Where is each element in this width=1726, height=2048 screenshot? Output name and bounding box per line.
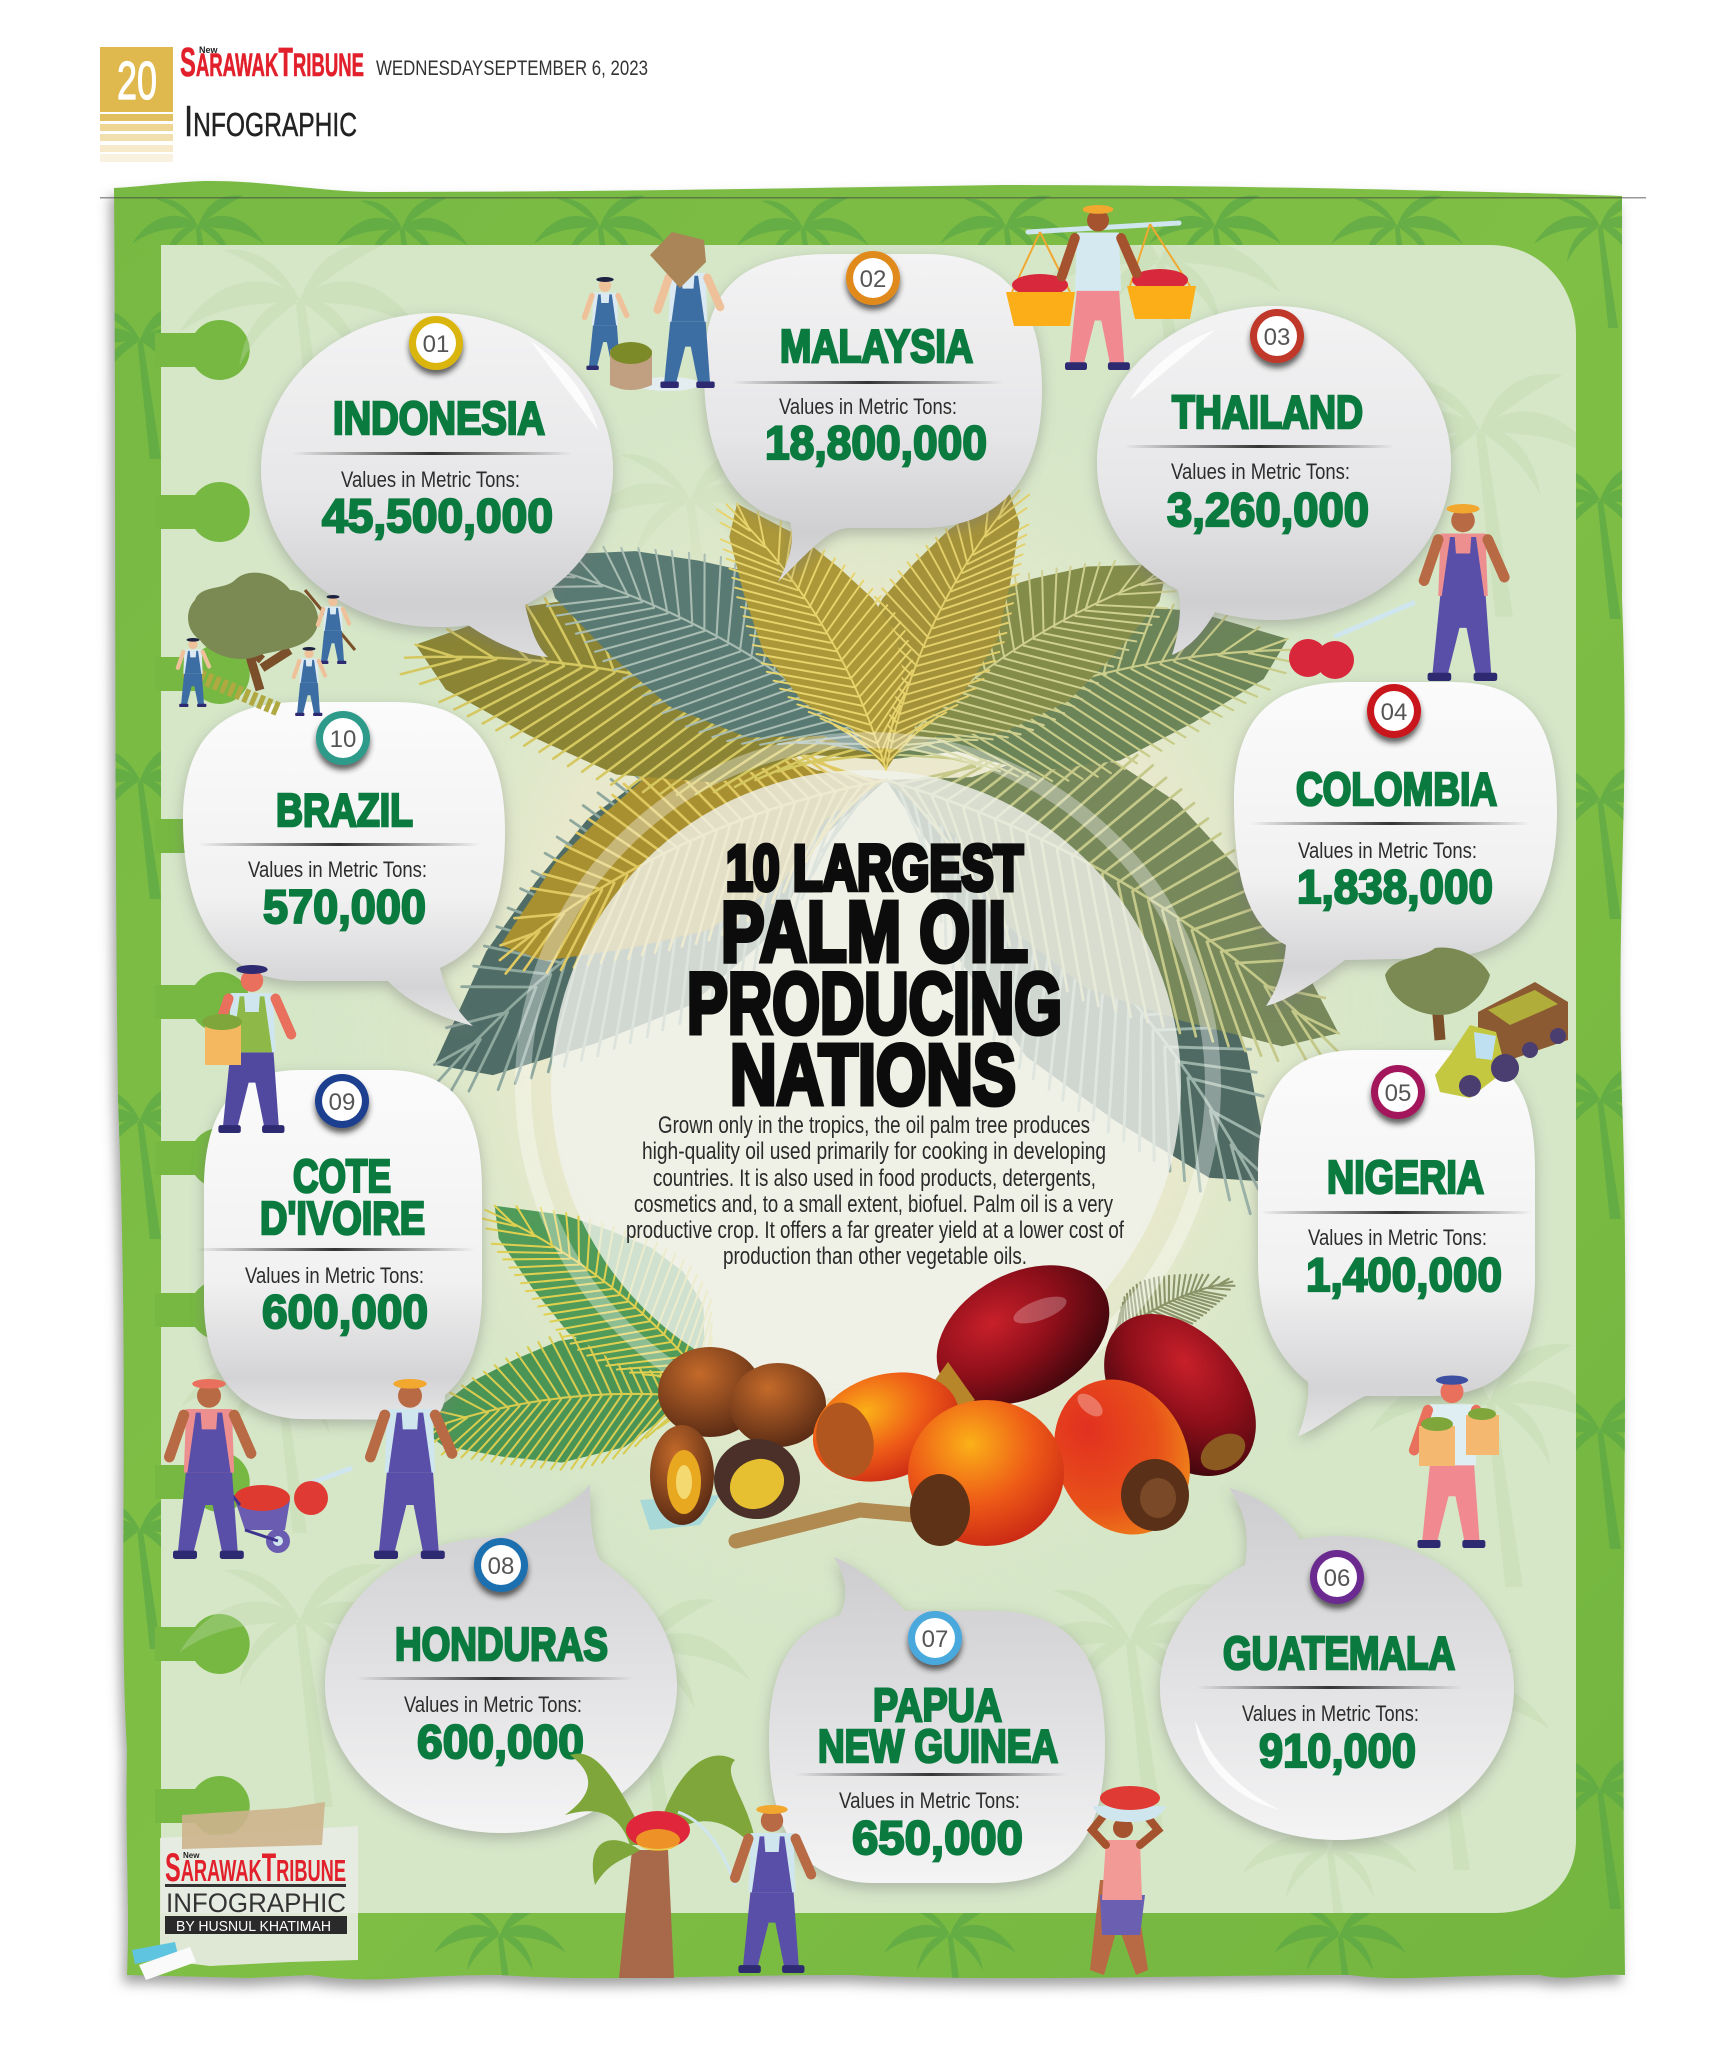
title: 10 LARGEST [726,832,1023,904]
badge 03: 03 [1264,324,1290,351]
description text: production than other vegetable oils. [723,1243,1027,1270]
description text: productive crop. It offers a far greater yield at a lower cost of [626,1217,1124,1244]
badge 08: 08 [488,1553,514,1580]
description text: countries. It is also used in food products, detergents, [653,1165,1096,1192]
metric label: Values in Metric Tons: [1242,1701,1419,1726]
bubble 08: Honduras [325,1484,677,1833]
palm fruit cluster [640,1237,1287,1557]
metric label: Values in Metric Tons: [1298,838,1477,863]
title: PRODUCING [687,956,1062,1052]
panel notebook holes [155,320,250,1836]
country name: THAILAND [1172,386,1363,438]
bubble 07: Papua New Guinea [769,1557,1105,1883]
credit: BY HUSNUL KHATIMAH [176,1918,331,1935]
sticker: infographic credit: New [183,1851,200,1860]
title [687,832,1062,1123]
masking tape [182,1802,325,1849]
illustration: workers with sack [585,232,720,391]
badge 02: 02 [860,266,886,293]
cream glow behind palm [310,360,1430,1640]
badge 03 [1250,309,1304,363]
central translucent circle [523,740,1213,1430]
illustration: woman with fruit basket [1090,1786,1166,1975]
badge 04: 04 [1381,699,1407,726]
badge 01: 01 [423,331,449,358]
metric label: Values in Metric Tons: [1308,1225,1487,1250]
illustration: worker at palm tree [735,1805,811,1973]
badge 07: 07 [922,1626,948,1653]
inner pale panel [161,245,1576,1913]
badge 09 [315,1074,369,1128]
pale panel palm pattern [179,204,1611,1986]
value: 650,000 [852,1811,1023,1864]
header: page number block [100,47,173,162]
illustration: tree with harvesters [178,573,355,716]
metric label: Values in Metric Tons: [248,857,427,882]
metric label: Values in Metric Tons: [245,1263,424,1288]
bubble 06: Guatemala [1160,1488,1514,1840]
title: NATIONS [730,1028,1016,1123]
header: section title: INFOGRAPHIC [184,97,357,146]
value: 910,000 [1259,1724,1416,1777]
badge 05 [1371,1065,1425,1119]
palm tree fronds [357,434,1403,1493]
value: 600,000 [417,1715,584,1768]
metric label: Values in Metric Tons: [404,1692,582,1717]
badge 10: 10 [330,726,356,753]
sticker title: INFOGRAPHIC [166,1888,346,1918]
illustration: workers with wheelbarrow [169,1379,452,1559]
illustration: woman with box [202,965,291,1133]
badge 08 [474,1538,528,1592]
bubble 03: Thailand [1097,306,1451,655]
sticker: infographic credit [132,1802,358,1980]
bubble 02: Malaysia [704,251,1042,582]
country name: GUATEMALA [1223,1627,1455,1679]
country name: NIGERIA [1327,1151,1484,1203]
illustration: bottom palm tree [565,1754,757,1978]
illustration: man with harvest tool [1289,504,1504,681]
value: 1,400,000 [1306,1248,1502,1301]
value: 18,800,000 [765,416,987,469]
country name: PAPUA [873,1679,1002,1731]
metric label: Values in Metric Tons: [1171,459,1350,484]
description text: high-quality oil used primarily for cooking in developing [642,1138,1106,1165]
bubble 10: Brazil [183,702,505,1026]
country name: INDONESIA [333,392,545,444]
value: 45,500,000 [322,489,553,542]
country name line 2: NEW GUINEA [818,1720,1058,1772]
country name line 2: D'IVOIRE [260,1192,425,1244]
bubble 04: Colombia [1234,682,1557,1006]
badge 10 [316,711,370,765]
bubble 01: Indonesia [261,313,613,657]
value: 3,260,000 [1167,483,1369,536]
green poster background [114,181,1625,1979]
header: date: WEDNESDAYSEPTEMBER 6, 2023 [376,57,648,80]
country name: COLOMBIA [1296,763,1497,815]
illustration: man with baskets [1006,205,1196,370]
metric label: Values in Metric Tons: [839,1788,1020,1813]
illustration: tree and tractor [1385,947,1568,1098]
value: 1,838,000 [1297,860,1493,913]
badge 05: 05 [1385,1080,1411,1107]
badge 06 [1310,1550,1364,1604]
country name: HONDURAS [395,1618,608,1670]
badge 02 [846,251,900,305]
badge 09: 09 [329,1089,355,1116]
country name: BRAZIL [276,784,413,836]
header: newspaper logo: SARAWAKTRIBUNE [180,39,364,85]
title: PALM OIL [721,885,1028,980]
country name: COTE [293,1150,391,1202]
description text [626,1112,1124,1270]
header: newspaper logo: New [199,45,219,55]
illustration: man with grocery bags [1414,1376,1499,1548]
country name: MALAYSIA [780,320,973,372]
reference line [100,197,1646,198]
description text: cosmetics and, to a small extent, biofuel. Palm oil is a very [634,1191,1113,1218]
badge 06: 06 [1324,1565,1350,1592]
bubble 09: Cote d'Ivoire [195,1070,482,1420]
badge 04 [1367,684,1421,738]
sticker logo: SARAWAKTRIBUNE [165,1846,346,1890]
value: 600,000 [262,1285,428,1338]
badge 01 [409,316,463,370]
badge 07 [908,1611,962,1665]
bubble 05: Nigeria [1258,1050,1535,1436]
metric label: Values in Metric Tons: [341,467,520,492]
header: page number block: 20 [117,51,157,111]
value: 570,000 [263,880,426,933]
metric label: Values in Metric Tons: [779,394,957,419]
description text: Grown only in the tropics, the oil palm tree produces [658,1112,1090,1139]
